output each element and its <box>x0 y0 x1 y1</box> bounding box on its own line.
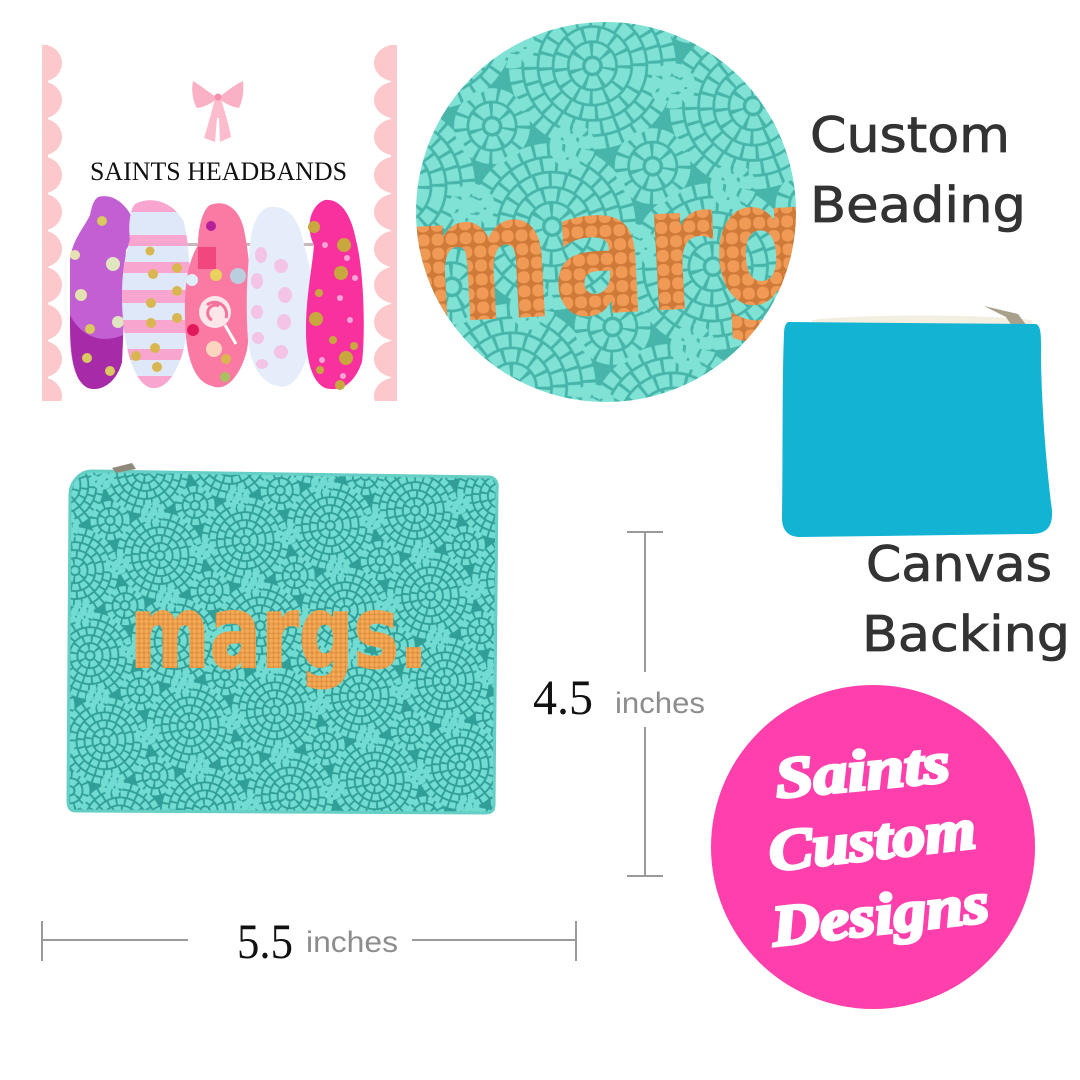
label: Custom Beading: Custom <box>810 107 1010 164</box>
label: Canvas Backing <box>862 536 1070 663</box>
icon: zipper pull <box>112 463 136 473</box>
height dimension arrow <box>627 532 663 876</box>
label: Custom Beading <box>810 107 1026 234</box>
height label: 4.5 inches: 4.5 <box>533 669 593 725</box>
icon: pink bow <box>192 81 243 142</box>
height label: 4.5 inches <box>533 669 705 725</box>
badge: Saints Custom Designs <box>711 685 1035 1009</box>
headband: striped <box>122 200 190 388</box>
scalloped side borders <box>42 45 397 401</box>
width label: 5.5 inches: inches <box>306 926 398 959</box>
width label: 5.5 inches: 5.5 <box>237 913 293 969</box>
headband: hot pink studded <box>306 200 364 390</box>
badge text: Designs <box>767 870 992 959</box>
badge text: Custom <box>765 796 979 884</box>
canvas backing pouch <box>782 306 1052 537</box>
text: marg in orange beads: marg <box>403 141 817 363</box>
label: Custom Beading: Beading <box>810 177 1026 234</box>
badge text <box>765 729 992 959</box>
headband rail <box>115 243 330 246</box>
beaded pouch <box>68 463 497 813</box>
panel: Saints headbands <box>42 45 397 401</box>
label: Canvas Backing: Backing <box>862 606 1070 663</box>
headband: purple <box>70 196 137 389</box>
width label: 5.5 inches <box>237 913 398 969</box>
panel title: SAINTS HEADBANDS <box>90 157 347 186</box>
width dimension arrow <box>42 921 576 961</box>
headband: pale blue jewelled <box>247 207 313 387</box>
height label: 4.5 inches: inches <box>615 687 705 720</box>
panel: beading close-up circle <box>403 22 817 402</box>
badge text: Saints <box>772 729 952 811</box>
text: margs in orange beads: margs. <box>130 574 428 691</box>
label: Canvas Backing: Canvas <box>866 536 1052 593</box>
headband: candy pink <box>185 203 251 387</box>
